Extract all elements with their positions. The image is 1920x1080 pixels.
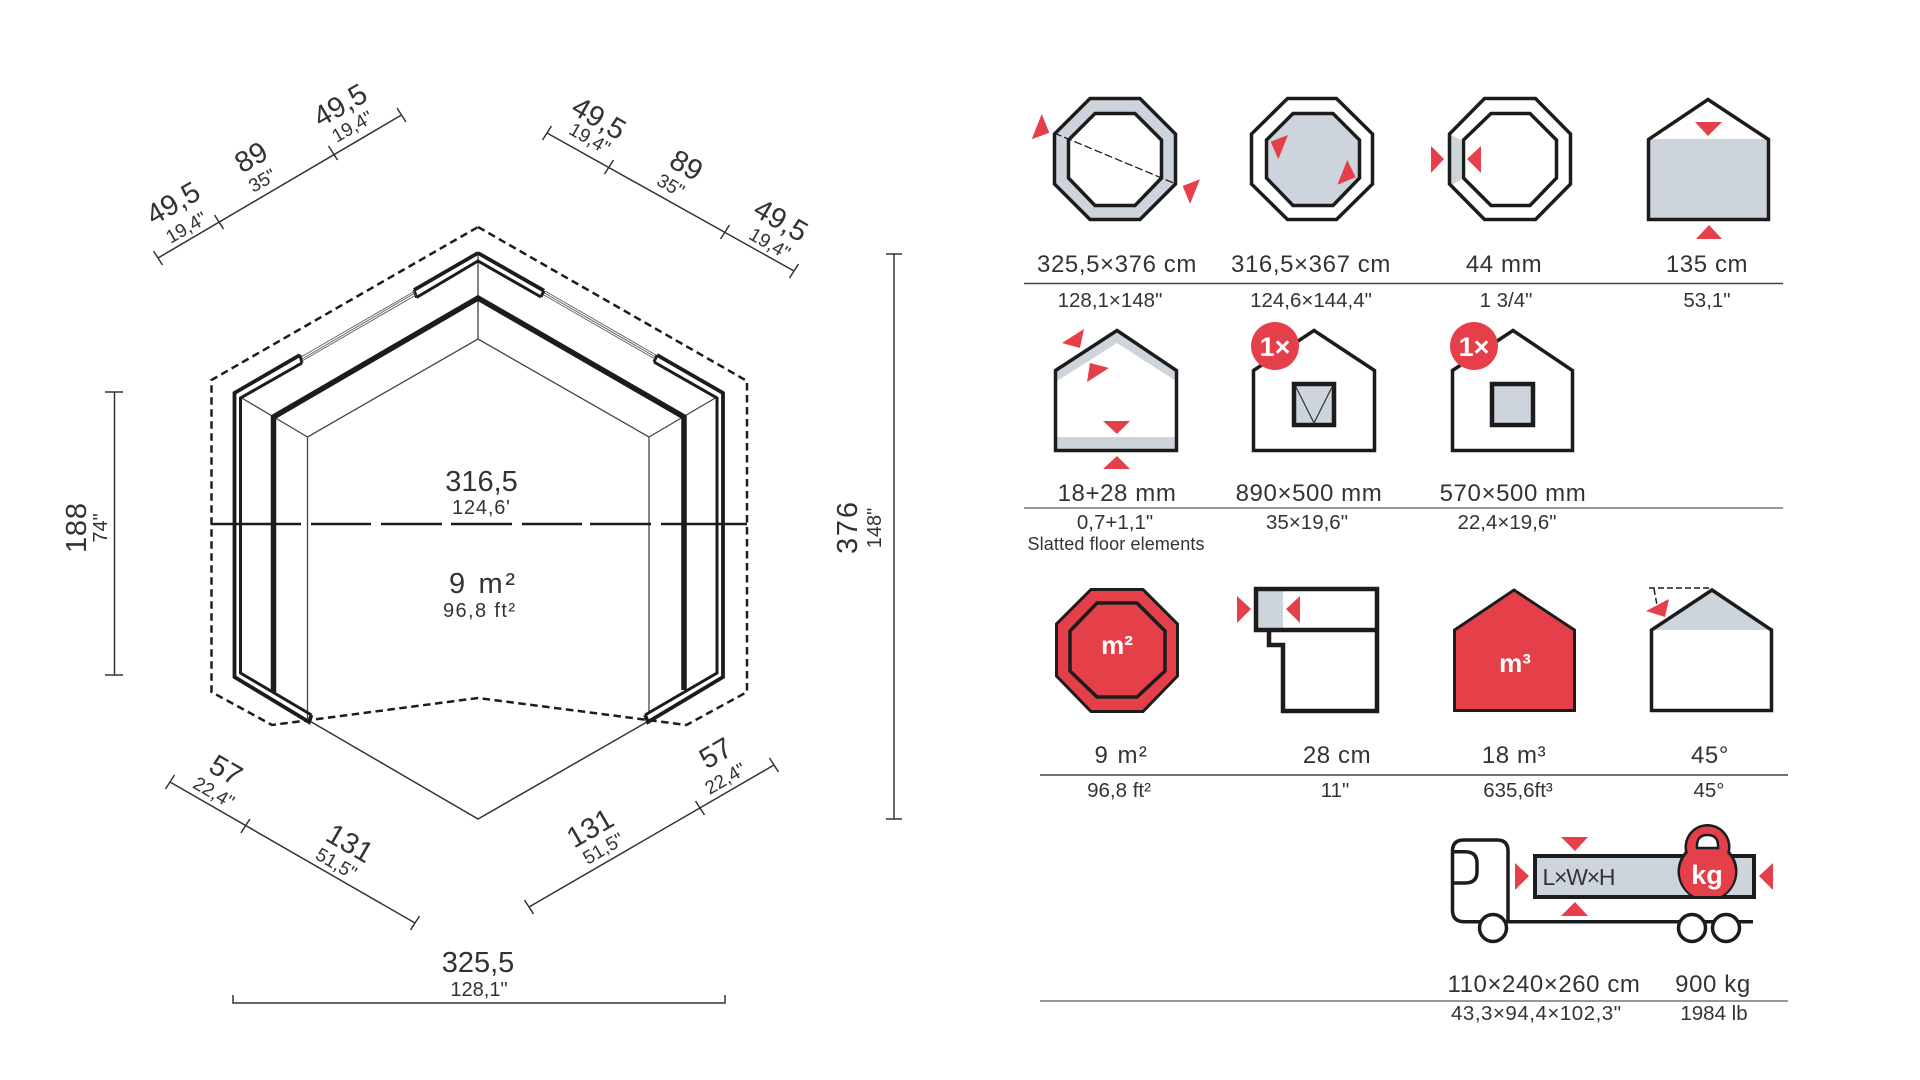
icon: fixed window: 1×: [1459, 332, 1489, 362]
text: wall thickness: 1 3/4": [1480, 289, 1532, 312]
dimension: left height: [61, 392, 123, 675]
text: door window: 35×19,6": [1266, 511, 1348, 534]
dimension: top right side: 19,4": [745, 224, 793, 264]
dimension: total depth: [832, 254, 902, 819]
dimension: bottom width: 128,1": [450, 979, 508, 1001]
text: wall thickness: 44 mm: [1466, 251, 1542, 278]
divider row 4: [1040, 1000, 1788, 1002]
floor area label: 96,8 ft²: [443, 600, 515, 622]
dimension: top left side: 49,5: [308, 78, 373, 134]
window segments: [301, 291, 656, 361]
icon: inner dimensions: [1252, 98, 1372, 220]
dimension: bottom right side: 131: [562, 803, 619, 855]
text: roof and floor thickness: [1028, 480, 1204, 554]
text: wall height: 135 cm: [1666, 251, 1748, 278]
text: inner dimensions: [1231, 251, 1391, 312]
text: wall thickness: [1466, 251, 1542, 312]
dimension: left height: 74": [90, 513, 112, 543]
text: floor area: [1087, 742, 1151, 802]
ridge and corner lines: [240, 252, 717, 437]
dimension: total depth: 148": [864, 508, 886, 548]
text: door window: [1236, 480, 1382, 534]
floor plan drawing: [211, 227, 747, 819]
icon: roof overhang: [1237, 589, 1377, 711]
dimension: top right side: 49,5: [748, 193, 813, 249]
icon: fixed window: [1450, 322, 1572, 450]
text: fixed window: 22,4×19,6": [1457, 511, 1557, 534]
dimension: top right side: [542, 91, 813, 278]
text: volume: [1482, 742, 1553, 802]
outer wall line: [234, 253, 723, 722]
dimension: top left side: 19,4": [329, 107, 377, 147]
icon: door window: [1251, 322, 1374, 450]
kettlebell weight: kg: [1691, 860, 1723, 890]
dimension: top right side: 89: [664, 144, 708, 188]
dimension: top right side: 35": [653, 170, 688, 202]
dimension: top left side: 19,4": [163, 208, 211, 248]
text: outer dimensions: 325,5×376 cm: [1037, 251, 1197, 278]
text: roof and floor thickness: Slatted floor elements: [1028, 534, 1204, 554]
inner thin wall line: [308, 339, 649, 720]
text: package size: 43,3×94,4×102,3": [1451, 1002, 1621, 1025]
icon: wall thickness: [1431, 98, 1570, 220]
interior width label: [445, 466, 518, 519]
icon: floor area: m²: [1101, 630, 1133, 660]
text: outer dimensions: 128,1×148": [1058, 289, 1162, 312]
icon: outer dimensions: [1032, 98, 1200, 220]
dimension: bottom right side: 51,5": [580, 829, 628, 869]
text: roof and floor thickness: 18+28 mm: [1058, 480, 1176, 507]
text: package weight: 900 kg: [1675, 971, 1751, 998]
text: inner dimensions: 124,6×144,4": [1250, 289, 1372, 312]
text: roof overhang: 28 cm: [1303, 742, 1371, 769]
text: floor area: 96,8 ft²: [1087, 779, 1151, 802]
floor area label: [443, 568, 515, 622]
text: wall height: [1666, 251, 1748, 312]
text: wall height: 53,1": [1683, 289, 1731, 312]
dimension: top left side: 89: [230, 136, 273, 180]
text: roof and floor thickness: 0,7+1,1": [1077, 511, 1153, 534]
text: roof overhang: 11": [1321, 779, 1349, 802]
dimension: top right side: 19,4": [565, 119, 613, 159]
inner wall line: [240, 261, 717, 715]
icon: roof angle: [1646, 588, 1772, 710]
dimension: top right side: 49,5: [566, 91, 631, 147]
icon: wall height: [1648, 100, 1768, 239]
text: package size: [1448, 971, 1640, 1025]
dimension: top left side: 35": [245, 165, 280, 197]
cargo label: L×W×H: [1542, 864, 1616, 890]
text: package weight: [1675, 971, 1751, 1025]
dimension: bottom width: [233, 947, 725, 1003]
icon: floor area: [1056, 590, 1178, 712]
cargo box: [1535, 856, 1754, 897]
width dashed centre line: [211, 523, 747, 525]
divider row 3: [1040, 774, 1788, 776]
text: roof angle: 45°: [1693, 779, 1725, 802]
text: floor area: 9 m²: [1094, 742, 1148, 769]
text: roof angle: [1691, 742, 1729, 802]
dimension: bottom left side: 51,5": [312, 844, 360, 884]
interior width label: 124,6': [452, 497, 510, 519]
dimension: top left side: [141, 78, 406, 265]
divider row 2: [1024, 507, 1783, 509]
text: package weight: 1984 lb: [1680, 1002, 1748, 1025]
text: door window: 890×500 mm: [1236, 480, 1382, 507]
text: fixed window: 570×500 mm: [1440, 480, 1586, 507]
icon: roof and floor thickness: [1056, 329, 1176, 469]
text: volume: 18 m³: [1482, 742, 1546, 769]
dimension: total depth: 376: [832, 502, 864, 554]
text: fixed window: [1440, 480, 1586, 534]
text: outer dimensions: [1037, 251, 1197, 312]
icon: volume: m³: [1499, 648, 1531, 678]
text: roof overhang: [1303, 742, 1371, 802]
text: package size: 110×240×260 cm: [1448, 971, 1640, 998]
icon: door window: 1×: [1260, 332, 1290, 362]
text: roof angle: 45°: [1691, 742, 1729, 769]
dimension: bottom right side: 57: [694, 732, 738, 776]
cargo arrows: [1515, 837, 1773, 916]
dimension: bottom left side: [166, 749, 420, 930]
dimension: bottom left side: 57: [204, 749, 247, 793]
dimension: left height: 188: [61, 503, 93, 553]
truck wheels: [1480, 914, 1740, 942]
dimension: bottom left side: 22,4": [189, 773, 237, 813]
text: volume: 635,6ft³: [1483, 779, 1553, 802]
inner thick wall: [274, 298, 684, 692]
dimension: top left side: 49,5: [141, 176, 206, 232]
floor area label: 9 m²: [449, 568, 515, 600]
interior width label: 316,5: [445, 466, 518, 498]
dimension: bottom width: 325,5: [442, 947, 514, 979]
kettlebell weight: [1678, 824, 1738, 897]
dimension: bottom left side: 131: [321, 818, 378, 870]
divider row 1: [1024, 282, 1783, 284]
icon: transport truck: [1452, 824, 1773, 942]
dimension: bottom right side: [524, 732, 778, 914]
dimension: bottom right side: 22,4": [702, 759, 750, 799]
truck cab and chassis: [1452, 840, 1753, 922]
dashed roof outline: [212, 227, 747, 725]
icon: volume: [1454, 590, 1574, 710]
text: inner dimensions: 316,5×367 cm: [1231, 251, 1391, 278]
terrace boundary: [308, 720, 647, 819]
